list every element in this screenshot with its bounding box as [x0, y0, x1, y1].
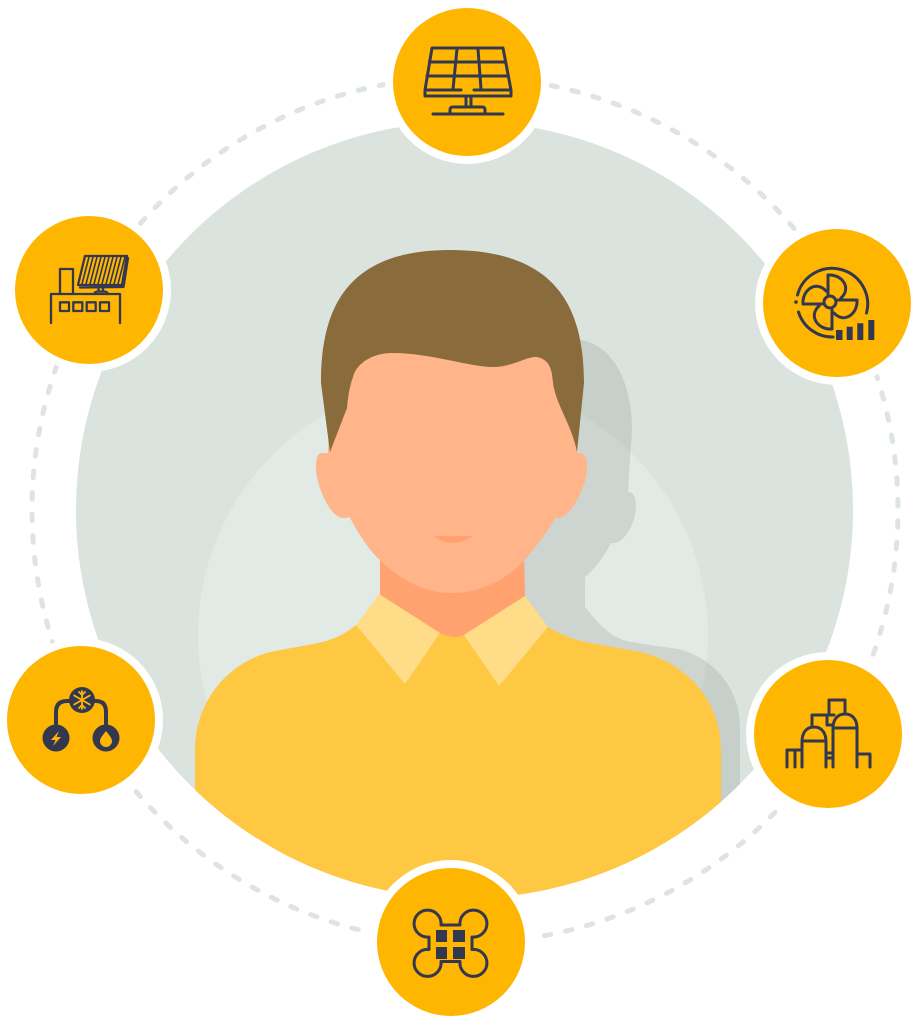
- badge: refinery: [746, 652, 910, 816]
- inner light circle: [198, 380, 708, 890]
- icon: power, cold and heat flow: [42, 687, 120, 752]
- shirt: [195, 594, 721, 920]
- hair: [321, 250, 584, 452]
- mouth: [433, 536, 473, 543]
- badge: trigeneration flow: [0, 638, 163, 802]
- icon: processor: [414, 910, 487, 976]
- badge: solar panel: [385, 0, 549, 164]
- icon: refinery: [787, 700, 870, 767]
- ear left: [316, 453, 354, 518]
- badge: solar factory: [7, 208, 171, 372]
- badge: processor network: [369, 860, 533, 1024]
- dashed orbit ring: [32, 77, 898, 943]
- person figure: [195, 250, 740, 920]
- face: [328, 335, 577, 593]
- icon: factory with solar panel: [51, 256, 128, 323]
- icon: solar panel: [425, 48, 511, 114]
- neck: [380, 550, 525, 637]
- large background circle: [76, 122, 853, 898]
- badge: fan with level bars: [755, 221, 918, 385]
- icon: fan: [794, 268, 874, 340]
- ear right: [548, 453, 587, 518]
- collar left: [356, 594, 440, 684]
- collar right: [464, 596, 548, 686]
- person shadow: [524, 340, 740, 802]
